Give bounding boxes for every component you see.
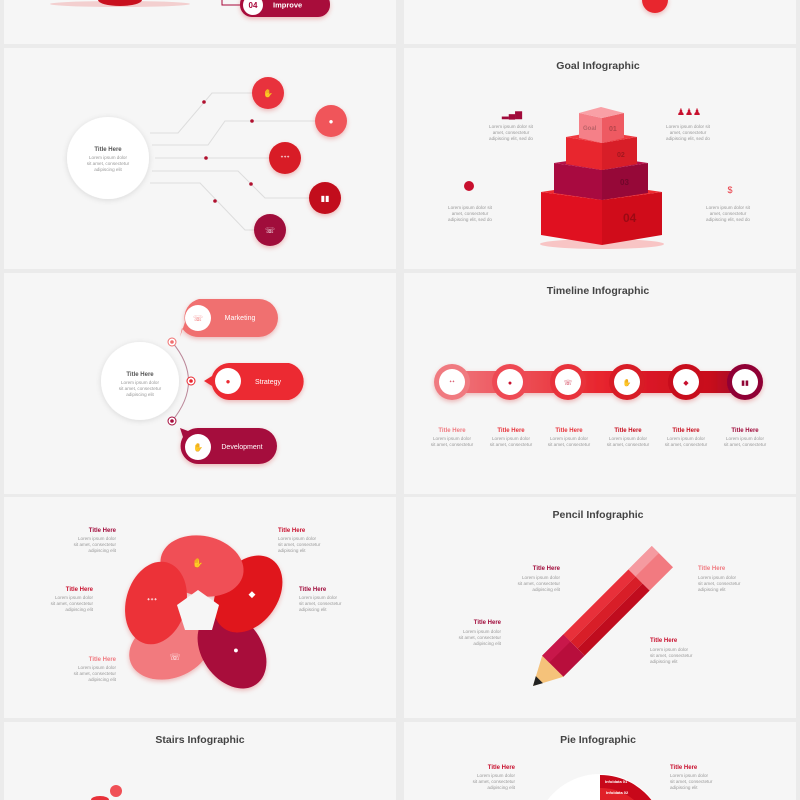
- pyramid: 03: [620, 178, 629, 187]
- panel: mind map: ☏: [265, 226, 275, 235]
- labels: Lorem ipsum dolor: [55, 595, 93, 600]
- pyramid: 01: [609, 126, 617, 133]
- timeline labels: Lorem ipsum dolor: [433, 436, 471, 441]
- panel: pentagon flower: [51, 528, 342, 702]
- panel: goal infographic: Lorem ipsum dolor sit: [706, 205, 751, 210]
- panel: pentagon flower: ◆: [249, 589, 256, 599]
- top-left partial: red blob and Improve pill: [50, 0, 330, 17]
- panel: pie: Lorem ipsum dolor: [477, 773, 515, 778]
- labels: Title Here: [89, 657, 117, 663]
- panel: pencil: adipiscing elit: [532, 587, 561, 592]
- labels: [51, 528, 117, 682]
- labels: Title Here: [89, 528, 117, 534]
- panel: pencil: adipiscing elit: [650, 659, 678, 664]
- panel: timeline: ☏: [564, 379, 573, 387]
- petals: [116, 528, 297, 702]
- labels: sit amet, consectetur: [74, 671, 116, 676]
- panel: stairs: [91, 734, 245, 800]
- panel: pencil: Lorem ipsum dolor: [650, 647, 689, 652]
- panel: pentagon flower: Title Here: [299, 587, 327, 593]
- labels: sit amet, consectetur: [74, 542, 116, 547]
- timeline labels: sit amet, consectetur: [607, 442, 650, 447]
- pyramid: 04: [623, 211, 637, 225]
- panel: pentagon flower: adipiscing elit: [278, 548, 306, 553]
- timeline labels: Lorem ipsum dolor: [667, 436, 705, 441]
- panel: pie: Pie Infographic: [560, 734, 636, 746]
- pyramid: 02: [617, 152, 625, 159]
- pill: Marketing: [180, 299, 278, 337]
- panel: mind map: ᐩᐩᐩ: [280, 154, 290, 163]
- timeline labels: Title Here: [614, 428, 642, 434]
- timeline labels: Lorem ipsum dolor: [726, 436, 764, 441]
- timeline labels: Lorem ipsum dolor: [492, 436, 530, 441]
- panel: goal infographic: amet, consectetur: [710, 211, 747, 216]
- goal notes: ▂▄▆: [501, 109, 523, 120]
- panel: pie: Lorem ipsum dolor: [670, 773, 709, 778]
- panel: pencil: adipiscing elit: [473, 641, 502, 646]
- panel: pie: sit amet, consectetur: [473, 779, 515, 784]
- panel: pencil: Title Here: [533, 566, 561, 572]
- panel: pie: Infoldata 01: [605, 779, 628, 784]
- panel: pentagon flower: Lorem ipsum dolor: [278, 536, 317, 541]
- labels: sit amet, consectetur: [51, 601, 93, 606]
- panel: pie: sit amet, consectetur: [670, 779, 713, 784]
- top-left partial: red blob and Improve pill: Improve: [273, 0, 302, 10]
- panel: goal infographic: adipiscing elit, sed do: [666, 136, 710, 141]
- panel: goal infographic: ♟♟♟: [677, 107, 701, 117]
- center circle: [67, 117, 149, 199]
- center circle: Title Here: [94, 147, 122, 153]
- pill: Marketing: Marketing: [225, 315, 255, 322]
- labels: adipiscing elit: [88, 548, 117, 553]
- panel: mind map: ▮▮: [321, 194, 329, 203]
- center circle: Lorem ipsum dolor: [89, 155, 127, 160]
- center circle: adipiscing elit: [94, 167, 123, 172]
- timeline labels: Title Here: [497, 428, 525, 434]
- panel: timeline: Timeline Infographic: [547, 285, 649, 297]
- pyramid: Goal: [583, 126, 597, 132]
- timeline labels: Title Here: [731, 428, 759, 434]
- pill: Marketing: ☏: [193, 314, 203, 323]
- timeline labels: sit amet, consectetur: [724, 442, 767, 447]
- pill: Strategy: ●: [226, 377, 231, 386]
- center circle: [101, 342, 179, 420]
- panel: goal infographic: adipiscing elit, sed do: [706, 217, 750, 222]
- arc with dots: [172, 342, 188, 421]
- panel: goal infographic: adipiscing elit, sed do: [448, 217, 492, 222]
- panel: pencil: Title Here: [474, 620, 502, 626]
- panel: pentagon flower: sit amet, consectetur: [299, 601, 342, 606]
- top-right partial: red circle: [642, 0, 668, 13]
- goal notes: [489, 109, 534, 141]
- timeline labels: sit amet, consectetur: [665, 442, 708, 447]
- panel: stairs: Stairs Infographic: [155, 734, 245, 746]
- panel: pentagon flower: ●: [233, 645, 239, 655]
- connector lines: [150, 93, 315, 230]
- top-left partial: red blob and Improve pill: 04: [249, 1, 258, 10]
- panel: pie: Title Here: [670, 765, 698, 771]
- panel: pencil: [459, 509, 741, 697]
- panel: pencil: sit amet, consectetur: [518, 581, 560, 586]
- panel: goal infographic: amet, consectetur: [670, 130, 707, 135]
- panel: pencil: Lorem ipsum dolor: [698, 575, 737, 580]
- goal notes: adipiscing elit, sed do: [489, 136, 533, 141]
- timeline labels: [431, 428, 767, 447]
- panel: pentagon flower: sit amet, consectetur: [278, 542, 321, 547]
- panel: mind map: ●: [329, 117, 334, 126]
- panel: timeline: ✋: [623, 378, 631, 387]
- panel: pentagon flower: Lorem ipsum dolor: [299, 595, 338, 600]
- panel: goal infographic: [448, 60, 751, 249]
- labels: adipiscing elit: [65, 607, 94, 612]
- center circle: sit amet, consectetur: [119, 386, 162, 391]
- timeline labels: sit amet, consectetur: [490, 442, 533, 447]
- panel: goal infographic: Lorem ipsum dolor sit: [448, 205, 493, 210]
- labels: Lorem ipsum dolor: [78, 536, 116, 541]
- pill: Development: Development: [221, 444, 263, 451]
- center circle: Lorem ipsum dolor: [121, 380, 159, 385]
- panel: pencil: Lorem ipsum dolor: [522, 575, 560, 580]
- pyramid: [540, 107, 664, 249]
- panel: timeline: ▮▮: [741, 380, 749, 387]
- labels: Title Here: [66, 587, 94, 593]
- center circle: sit amet, consectetur: [87, 161, 130, 166]
- panel: pentagon flower: adipiscing elit: [299, 607, 327, 612]
- panel: goal infographic: $: [727, 185, 733, 195]
- panel: mind map: ✋: [263, 88, 273, 98]
- panel: timeline: ᐩᐩ: [449, 380, 455, 387]
- panel: pencil: Title Here: [698, 566, 726, 572]
- panel: timeline: [431, 285, 767, 447]
- chain: [434, 364, 763, 400]
- timeline labels: sit amet, consectetur: [548, 442, 591, 447]
- panel: pencil: Lorem ipsum dolor: [463, 629, 501, 634]
- timeline labels: Lorem ipsum dolor: [609, 436, 647, 441]
- timeline labels: Title Here: [438, 428, 466, 434]
- panel: pencil: sit amet, consectetur: [698, 581, 741, 586]
- panel: timeline: ●: [508, 380, 512, 387]
- panel: pie: adipiscing elit: [487, 785, 516, 790]
- pill: Strategy: [204, 363, 304, 400]
- goal notes: amet, consectetur: [493, 130, 530, 135]
- panel: pencil: sit amet, consectetur: [459, 635, 501, 640]
- timeline labels: sit amet, consectetur: [431, 442, 474, 447]
- pill: Development: ✋: [193, 442, 203, 452]
- panel: goal infographic: Goal Infographic: [556, 60, 640, 72]
- goal notes: Lorem ipsum dolor sit: [489, 124, 534, 129]
- pill: Development: [180, 428, 277, 464]
- panel: pencil: adipiscing elit: [698, 587, 726, 592]
- panel: pie: Title Here: [488, 765, 516, 771]
- panel: pentagon flower: ᐩᐩᐩ: [147, 596, 158, 606]
- panel: mind map: [67, 77, 347, 246]
- panel: pie: Infoldata 02: [606, 790, 629, 795]
- panel: goal infographic: amet, consectetur: [452, 211, 489, 216]
- panel: speech pills: [101, 299, 304, 464]
- center circle: Title Here: [126, 372, 154, 378]
- panel: pie: [473, 734, 713, 800]
- labels: Lorem ipsum dolor: [78, 665, 116, 670]
- panel: timeline: ◆: [683, 380, 689, 387]
- icon circles: [252, 77, 347, 246]
- panel: goal infographic: Lorem ipsum dolor sit: [666, 124, 711, 129]
- panel: pencil: Pencil Infographic: [552, 509, 644, 521]
- panel: pencil: Title Here: [650, 638, 678, 644]
- panel: pentagon flower: ✋: [192, 557, 204, 568]
- timeline labels: Title Here: [672, 428, 700, 434]
- center circle: adipiscing elit: [126, 392, 155, 397]
- labels: adipiscing elit: [88, 677, 117, 682]
- pill: Strategy: Strategy: [255, 379, 282, 386]
- timeline labels: Title Here: [555, 428, 583, 434]
- panel: pentagon flower: ☏: [169, 652, 181, 662]
- pencil: [522, 546, 673, 697]
- panel: pentagon flower: Title Here: [278, 528, 306, 534]
- panel: pencil: sit amet, consectetur: [650, 653, 693, 658]
- timeline labels: Lorem ipsum dolor: [550, 436, 588, 441]
- panel: pie: adipiscing elit: [670, 785, 698, 790]
